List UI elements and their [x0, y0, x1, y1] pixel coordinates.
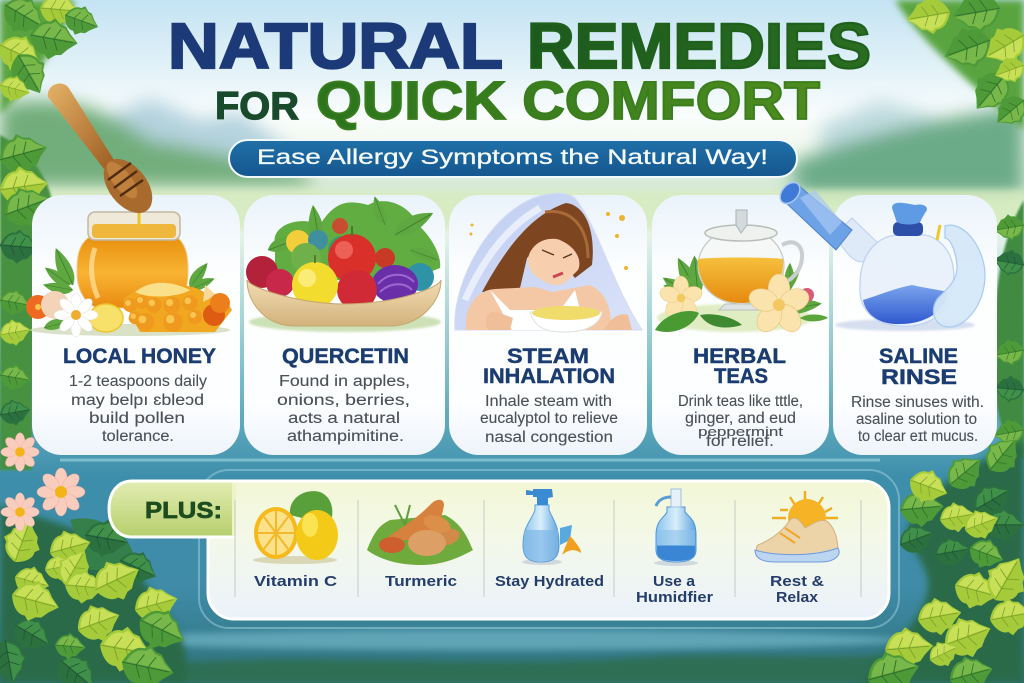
icon: neti pot	[776, 179, 985, 331]
body text: ginger, and eud	[685, 410, 796, 427]
icon: honey jar	[41, 206, 216, 308]
heading: QUERCETIN	[282, 345, 409, 368]
foliage: top right	[895, 0, 1024, 134]
body text: Drink teas like tttle,	[678, 393, 803, 410]
icon: honey dipper	[48, 84, 162, 222]
body text: may belpı ɛbleɔd	[71, 392, 204, 409]
body text: asaline solution to	[856, 411, 977, 428]
icon: sun and sneaker	[755, 491, 839, 562]
foliage: left side	[0, 127, 58, 470]
heading	[879, 345, 958, 389]
subtitle pill: Ease Allergy Symptoms the Natural Way!	[257, 145, 768, 169]
title: NATURAL	[168, 10, 503, 82]
body text	[277, 373, 410, 445]
title: REMEDIES	[527, 10, 871, 82]
panel: herbal teas	[655, 210, 828, 450]
label: Stay Hydrated	[495, 573, 604, 590]
body text: acts a natural	[288, 410, 400, 427]
icon: vitamin C lemons	[253, 491, 338, 564]
body text: eucalyptol to relieve	[480, 410, 618, 427]
heading: RINSE	[881, 366, 957, 389]
body text: Found in apples,	[279, 373, 410, 390]
icon: spray bottle	[522, 489, 581, 565]
glowing frame line	[60, 458, 880, 462]
icon: woman under towel over steam bowl	[455, 193, 642, 332]
body text: Rinse sinuses with.	[851, 394, 984, 411]
label	[636, 573, 713, 606]
label	[770, 573, 824, 606]
icon: honey pile, lemon and flowers	[26, 283, 232, 337]
body text: nasal congestion	[485, 429, 613, 446]
foliage: right side	[991, 200, 1024, 460]
foliage: bottom right	[860, 429, 1024, 683]
body text: for relief.	[706, 433, 774, 450]
heading: TEAS	[714, 365, 768, 388]
title	[168, 10, 871, 131]
tab: PLUS	[109, 481, 236, 537]
body text: Inhale steam with	[485, 393, 612, 410]
body text: to clear eɪt mucus.	[858, 428, 978, 445]
heading: HERBAL	[693, 345, 786, 368]
panel: plus tips	[109, 470, 899, 628]
title: FOR	[215, 85, 299, 128]
tab: PLUS: PLUS:	[145, 497, 222, 523]
heading: LOCAL HONEY	[63, 345, 216, 368]
body text	[678, 393, 803, 450]
body text: athampimitine.	[287, 428, 404, 445]
body text: tolerance.	[102, 428, 174, 445]
card backgrounds	[32, 195, 997, 455]
subtitle pill	[229, 140, 797, 177]
grass bottom	[170, 652, 900, 683]
body text: peppermint	[698, 424, 783, 439]
heading: SALINE	[879, 345, 958, 368]
body text	[851, 394, 984, 445]
label: Use a	[653, 573, 696, 590]
label: Rest &	[770, 573, 824, 590]
panel: quercetin	[246, 195, 441, 445]
heading	[483, 345, 615, 388]
body text	[69, 373, 207, 445]
icon: humidifier bottle	[654, 489, 698, 566]
heading: STEAM	[507, 345, 589, 368]
label: Vitamin C	[254, 573, 337, 590]
heading	[693, 345, 786, 388]
panel: local honey	[26, 84, 232, 445]
label: Turmeric	[385, 573, 457, 590]
body text: 1-2 teaspoons daily	[69, 373, 207, 390]
label: Humidfier	[636, 589, 713, 606]
heading: INHALATION	[483, 365, 615, 388]
foliage: bottom left with flowers	[0, 433, 193, 683]
body text	[480, 393, 618, 446]
distant landscape	[0, 98, 1024, 195]
body text: build pollen	[89, 410, 185, 427]
title: QUICK COMFORT	[316, 71, 820, 131]
panel: steam inhalation	[455, 193, 642, 446]
body text: onions, berries,	[277, 392, 410, 409]
icon: fruit bowl	[246, 195, 441, 332]
panel: saline rinse	[776, 179, 985, 445]
icon: turmeric roots	[367, 500, 473, 565]
icon: glass teapot with herbs	[655, 210, 828, 336]
label: Relax	[776, 589, 819, 606]
foliage: top left	[0, 0, 103, 115]
